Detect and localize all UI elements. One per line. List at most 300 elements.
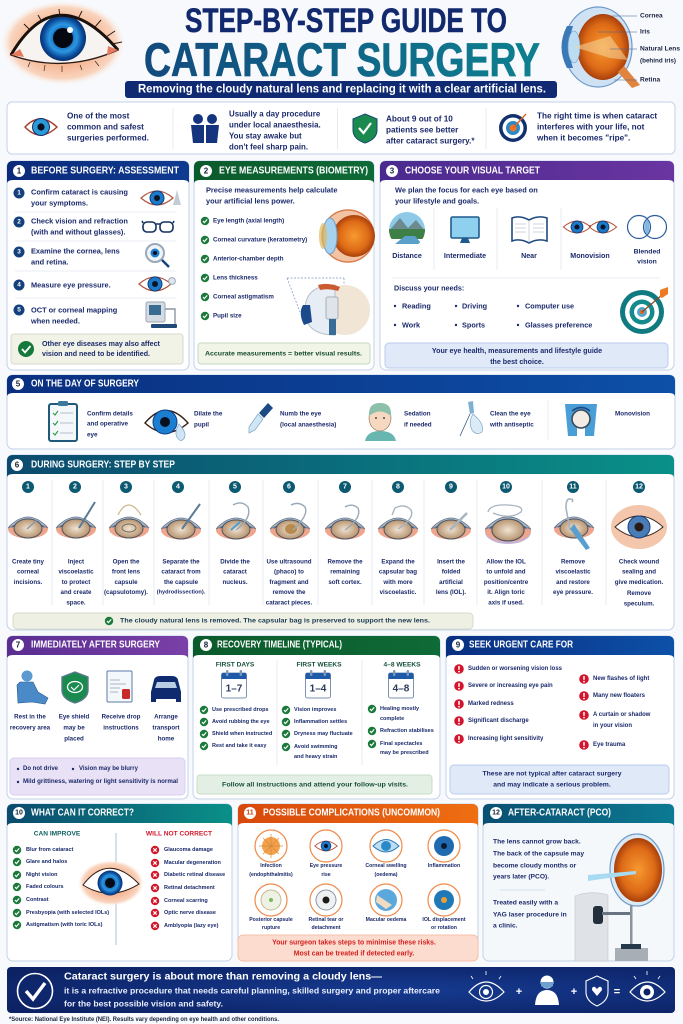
callout: what to expect: Mild grittiness, watering or light sensitivity is normal bbox=[23, 779, 178, 785]
complication: corneal swelling: Corneal swelling bbox=[365, 863, 407, 869]
icon: glasses bbox=[142, 221, 174, 232]
item: dilate pupil: pupil bbox=[194, 422, 209, 428]
intro text: your artificial lens power. bbox=[206, 196, 295, 206]
step 10: position/centre bbox=[484, 579, 529, 586]
step 9: artificial bbox=[439, 579, 463, 586]
step 9: Insert the bbox=[437, 558, 465, 566]
callout: capsular bag preserved: The cloudy natural lens is removed. The capsular bag is preserved to support the new lens. bbox=[120, 618, 430, 624]
header: after surgery bbox=[7, 636, 188, 658]
icon: OCT machine bbox=[146, 302, 177, 328]
needs list bbox=[394, 284, 592, 330]
header: what can it correct: WHAT CAN IT CORRECT? bbox=[31, 808, 134, 818]
column: first weeks bbox=[282, 662, 353, 760]
option: distance bbox=[388, 212, 426, 260]
fact: safest surgeries: surgeries performed. bbox=[67, 134, 149, 142]
item: transport home: home bbox=[158, 736, 175, 742]
fact: right time: The right time is when cataract bbox=[537, 112, 657, 120]
step 11: 11 bbox=[569, 484, 577, 490]
list: can improve: CAN IMPROVE bbox=[34, 830, 81, 838]
list: can improve: Contrast bbox=[26, 897, 49, 903]
complication: retinal tear: Retinal tear or bbox=[309, 917, 343, 923]
step 3 bbox=[104, 481, 149, 596]
header: complications bbox=[238, 804, 478, 826]
header: after surgery: 7 bbox=[16, 640, 21, 650]
icon: target bbox=[499, 114, 527, 142]
panel 11: possible complications bbox=[238, 804, 478, 961]
needs list: Driving bbox=[462, 302, 487, 310]
intro text bbox=[395, 186, 538, 206]
intro text bbox=[206, 186, 337, 206]
needs list: Work bbox=[402, 320, 421, 330]
column: first days: Avoid rubbing the eye bbox=[212, 719, 270, 725]
step 8: 8 bbox=[396, 484, 400, 490]
list: will not correct bbox=[146, 830, 225, 930]
callout: serious problem: These are not typical after cataract surgery bbox=[482, 770, 622, 778]
list: will not correct: Retinal detachment bbox=[164, 885, 215, 891]
callout: follow-up visits: Follow all instructions and attend your follow-up visits. bbox=[222, 782, 408, 788]
list: can improve: Presbyopia (with selected IOLs) bbox=[26, 910, 109, 916]
icon: eye bbox=[25, 118, 57, 136]
fact: 9 out of 10: patients see better bbox=[386, 126, 459, 134]
text: explanation: become cloudy months or bbox=[493, 862, 577, 870]
column: 4 to 8 weeks: 4–8 WEEKS bbox=[383, 662, 421, 668]
fact: right time: when it becomes "ripe". bbox=[536, 134, 630, 142]
eye anatomy diagram with labels: Natural Lens bbox=[640, 46, 680, 52]
step 12: 12 bbox=[635, 484, 643, 490]
step 9: 9 bbox=[449, 484, 453, 490]
step 6: Use ultrasound bbox=[266, 558, 312, 566]
step 5: when needed. bbox=[30, 316, 80, 326]
header: recovery timeline: RECOVERY TIMELINE (TYPICAL) bbox=[217, 640, 342, 650]
item: drop instructions: instructions bbox=[103, 724, 139, 732]
header: complications: 11 bbox=[246, 810, 254, 816]
list: warning signs left: Marked redness bbox=[468, 701, 514, 707]
step 9: lens (IOL). bbox=[436, 589, 466, 596]
list: warning signs right: New flashes of light bbox=[593, 676, 649, 682]
complication: capsule rupture: rupture bbox=[262, 925, 280, 931]
header: during surgery: 6 bbox=[15, 460, 20, 470]
column: first weeks: Avoid swimming bbox=[294, 744, 338, 750]
step 12 bbox=[611, 481, 667, 608]
text: treatment: YAG laser procedure in bbox=[493, 912, 567, 918]
source footnote: *Source: National Eye Institute (NEI). Results vary depending on eye health and other conditions. bbox=[9, 1017, 279, 1023]
eye anatomy diagram with labels: (behind iris) bbox=[640, 58, 676, 64]
equation icons: eye + surgeon + shield = better vision: = bbox=[614, 986, 620, 998]
illustration: YAG laser device bbox=[575, 893, 648, 961]
fact: safest surgeries: One of the most bbox=[67, 112, 130, 120]
header: biometry bbox=[194, 161, 374, 183]
step 11 bbox=[553, 481, 594, 596]
eye anatomy diagram with labels: Cornea bbox=[640, 12, 663, 20]
header: before surgery bbox=[7, 161, 189, 183]
step 4: 4 bbox=[176, 484, 180, 490]
step 2: Inject bbox=[68, 558, 84, 566]
header: biometry: 2 bbox=[204, 166, 209, 176]
step 5 bbox=[216, 481, 256, 586]
checklist of measurements: Pupil size bbox=[213, 312, 242, 320]
step 2: and create bbox=[61, 589, 92, 596]
header: before surgery: BEFORE SURGERY: ASSESSMENT bbox=[31, 166, 179, 176]
step 1: Create tiny bbox=[12, 558, 45, 566]
step 8 bbox=[378, 481, 418, 596]
fact: day procedure bbox=[229, 110, 321, 152]
item: clean with antiseptic: Clean the eye bbox=[490, 410, 531, 418]
icon: eye pressure bbox=[139, 277, 175, 291]
step 1: incisions. bbox=[14, 579, 43, 586]
step 9: folded bbox=[442, 568, 460, 576]
text: explanation: The back of the capsule may bbox=[493, 850, 584, 858]
callout: serious problem bbox=[450, 765, 669, 794]
step 5: 5 bbox=[233, 484, 237, 490]
complication: IOL displacement: or rotation bbox=[431, 925, 457, 931]
step 3: Open the bbox=[113, 558, 140, 566]
step 6: 6 bbox=[287, 484, 291, 490]
panel 10: what can it correct bbox=[7, 804, 232, 961]
column: 4 to 8 weeks bbox=[368, 662, 434, 756]
complication: pressure rise bbox=[310, 830, 342, 878]
step 3: 3 bbox=[17, 248, 21, 256]
step 11: and restore bbox=[556, 579, 590, 586]
title bbox=[144, 2, 540, 86]
list: will not correct: WILL NOT CORRECT bbox=[146, 830, 212, 838]
complication: capsule rupture bbox=[249, 884, 293, 931]
text: explanation: years later (PCO). bbox=[493, 874, 549, 880]
step 1: 1 bbox=[26, 484, 30, 490]
step 10: 10 bbox=[502, 484, 510, 490]
callout: other eye diseases: Other eye diseases may also affect bbox=[42, 340, 161, 348]
item: sedation: Sedation bbox=[404, 410, 431, 418]
item: monovision drape: Monovision bbox=[615, 410, 650, 418]
header hero eye illustration bbox=[1, 1, 125, 85]
item: sedation: if needed bbox=[404, 422, 432, 428]
column: first days: Shield when instructed bbox=[212, 731, 272, 737]
list: warning signs right: Many new floaters bbox=[593, 693, 646, 699]
step 11: Remove bbox=[561, 558, 586, 566]
item: confirm details: Confirm details bbox=[87, 410, 133, 418]
option: blended vision bbox=[628, 216, 666, 266]
icon: green shield bbox=[353, 114, 377, 143]
callout: accurate measurements bbox=[198, 343, 370, 364]
checklist of measurements: Lens thickness bbox=[213, 274, 258, 282]
list: can improve: Night vision bbox=[26, 872, 58, 878]
callout: minimise risks bbox=[238, 935, 478, 961]
fact: right time bbox=[536, 112, 657, 142]
option: monovision: Monovision bbox=[570, 252, 610, 260]
item: clean with antiseptic: with antiseptic bbox=[489, 422, 534, 428]
column: 4 to 8 weeks: Refraction stabilises bbox=[380, 728, 434, 734]
step 3: Examine the cornea, lens bbox=[31, 246, 120, 256]
header: visual target bbox=[380, 161, 674, 183]
header: after-cataract: 12 bbox=[492, 810, 500, 816]
panel 8: recovery timeline bbox=[193, 636, 440, 799]
complication: pressure rise: Eye pressure bbox=[310, 863, 342, 869]
checklist of measurements bbox=[201, 217, 307, 320]
item: drop instructions bbox=[102, 671, 141, 732]
step 6: remove the bbox=[272, 589, 306, 596]
item: numb the eye: (local anaesthesia) bbox=[280, 422, 336, 428]
column: 4 to 8 weeks: complete bbox=[380, 716, 404, 722]
step 7: soft cortex. bbox=[328, 579, 362, 586]
item: confirm details: eye bbox=[87, 432, 98, 438]
fact: right time: interferes with your life, not bbox=[537, 122, 645, 132]
callout: follow-up visits bbox=[197, 775, 432, 794]
fact: day procedure: under local anaesthesia. bbox=[229, 120, 321, 130]
step 10: to unfold and bbox=[486, 568, 526, 576]
item: eye shield: placed bbox=[64, 736, 84, 742]
item: eye shield bbox=[59, 672, 90, 742]
subtitle banner: Removing the cloudy natural lens and replacing it with a clear artificial lens. bbox=[138, 84, 546, 96]
column: first weeks: Inflammation settles bbox=[294, 719, 347, 725]
closing text: it is a refractive procedure that needs careful planning, skilled surgery and proper aftercare bbox=[64, 986, 440, 996]
callout: minimise risks: Your surgeon takes steps to minimise these risks. bbox=[272, 940, 436, 946]
item: clean with antiseptic bbox=[460, 401, 534, 436]
list: can improve: Glare and halos bbox=[26, 859, 67, 865]
step 12: give medication. bbox=[615, 579, 664, 586]
fact: 9 out of 10: after cataract surgery.* bbox=[386, 136, 475, 146]
step 12: Check wound bbox=[619, 558, 659, 566]
step 10 bbox=[484, 481, 531, 606]
option: intermediate: Intermediate bbox=[444, 252, 486, 260]
step 3: (capsulotomy). bbox=[104, 589, 148, 596]
column: first days: Use prescribed drops bbox=[212, 707, 269, 713]
complication: macular oedema bbox=[366, 884, 406, 923]
header: day of surgery: 5 bbox=[16, 380, 21, 388]
step 8: capsular bag bbox=[379, 568, 417, 576]
column: first weeks: and heavy strain bbox=[294, 754, 338, 760]
fact: day procedure: don't feel sharp pain. bbox=[229, 142, 308, 152]
callout: other eye diseases: vision and need to be identified. bbox=[42, 350, 150, 358]
step 3: and retina. bbox=[31, 258, 68, 266]
callout: best choice bbox=[385, 343, 668, 368]
complication: infection bbox=[249, 830, 293, 878]
step 1 bbox=[14, 188, 128, 208]
column: first weeks: 1–4 bbox=[310, 684, 327, 694]
step 3: 3 bbox=[124, 484, 128, 490]
illustration: central eye bbox=[78, 860, 144, 906]
option: near: Near bbox=[521, 252, 537, 260]
step 3 bbox=[14, 246, 120, 266]
step 6 bbox=[266, 481, 312, 606]
header: day of surgery: ON THE DAY OF SURGERY bbox=[31, 378, 139, 390]
header: what can it correct: 10 bbox=[15, 810, 23, 816]
complication: inflammation bbox=[428, 830, 460, 869]
list: warning signs left: Severe or increasing eye pain bbox=[468, 683, 553, 689]
step 6: (phaco) to bbox=[274, 568, 304, 576]
step 4: cataract from bbox=[161, 568, 201, 576]
step 4: Measure eye pressure. bbox=[31, 280, 111, 290]
needs list: Computer use bbox=[525, 302, 574, 310]
column: first days: 1–7 bbox=[226, 684, 243, 694]
complication: inflammation: Inflammation bbox=[428, 863, 460, 869]
complication: corneal swelling bbox=[365, 830, 407, 878]
header: complications: POSSIBLE COMPLICATIONS (UNCOMMON) bbox=[263, 808, 440, 818]
header: after-cataract bbox=[483, 804, 674, 826]
eye anatomy diagram with labels: Iris bbox=[640, 28, 650, 36]
item: confirm details bbox=[49, 401, 133, 441]
callout: serious problem: and may indicate a serious problem. bbox=[493, 782, 611, 788]
panel 9: seek urgent care bbox=[446, 636, 674, 799]
step 8: with more bbox=[382, 579, 413, 586]
title: STEP-BY-STEP GUIDE TO bbox=[185, 2, 507, 40]
callout: what to expect: Do not drive bbox=[23, 766, 59, 772]
list: warning signs left: Increasing light sensitivity bbox=[468, 736, 544, 742]
header: recovery timeline: 8 bbox=[204, 640, 209, 650]
step 1 bbox=[8, 481, 48, 586]
option: intermediate bbox=[444, 217, 486, 260]
step 1: your symptoms. bbox=[31, 198, 88, 208]
step 1: Confirm cataract is causing bbox=[31, 188, 128, 196]
header: during surgery bbox=[7, 455, 674, 477]
step 10: it. Align toric bbox=[487, 589, 525, 596]
title: CATARACT SURGERY bbox=[144, 33, 540, 86]
step 5 bbox=[14, 304, 118, 326]
intro text: your lifestyle and goals. bbox=[395, 196, 479, 206]
step 2: to protect bbox=[62, 579, 90, 586]
item: numb the eye bbox=[249, 403, 336, 433]
panel 1: before surgery assessment bbox=[7, 161, 189, 370]
column: 4 to 8 weeks: Final spectacles bbox=[380, 741, 422, 747]
closing banner bbox=[7, 967, 675, 1013]
list: will not correct: Macular degeneration bbox=[164, 860, 221, 866]
step 12: speculum. bbox=[624, 600, 655, 608]
panel 12: after-cataract PCO bbox=[483, 804, 674, 961]
fact: day procedure: Usually a day procedure bbox=[229, 110, 321, 118]
header: visual target: CHOOSE YOUR VISUAL TARGET bbox=[405, 166, 540, 176]
item: transport home: transport bbox=[152, 724, 180, 732]
panel 6: during surgery step by step bbox=[7, 455, 674, 630]
step 2 bbox=[14, 216, 128, 236]
step 7: remaining bbox=[330, 568, 360, 576]
illustration: biometer device bbox=[287, 278, 370, 335]
complication: infection: (endophthalmitis) bbox=[249, 872, 293, 878]
complication: IOL displacement bbox=[422, 884, 466, 931]
callout: best choice: the best choice. bbox=[490, 358, 544, 366]
subtitle banner bbox=[125, 81, 557, 98]
list: can improve: Faded colours bbox=[26, 884, 64, 890]
complication: macular oedema: Macular oedema bbox=[366, 917, 406, 923]
eye anatomy diagram with labels: Retina bbox=[640, 76, 660, 84]
callout: what to expect bbox=[10, 758, 185, 795]
complication: IOL displacement: IOL displacement bbox=[422, 917, 466, 923]
item: rest in recovery area: Rest in the bbox=[14, 714, 46, 720]
list: will not correct: Glaucoma damage bbox=[164, 847, 213, 853]
header: urgent care bbox=[446, 636, 674, 658]
text: explanation: The lens cannot grow back. bbox=[493, 838, 581, 846]
checklist of measurements: Corneal astigmatism bbox=[213, 294, 274, 300]
panel 5: on the day of surgery bbox=[7, 375, 675, 449]
header: before surgery: 1 bbox=[17, 166, 22, 176]
item: dilate pupil: Dilate the bbox=[194, 410, 223, 418]
item: rest in recovery area bbox=[10, 670, 51, 732]
illustration: eye cross-section bbox=[319, 210, 375, 262]
callout: best choice: Your eye health, measurements and lifestyle guide bbox=[432, 347, 602, 355]
step 2: viscoelastic bbox=[58, 568, 94, 576]
complication: infection: Infection bbox=[260, 863, 282, 869]
header: after-cataract: AFTER-CATARACT (PCO) bbox=[508, 808, 611, 818]
icon: target with arrow bbox=[620, 287, 668, 334]
item: drop instructions: Receive drop bbox=[102, 714, 141, 720]
header: urgent care: 9 bbox=[456, 640, 461, 650]
item: numb the eye: Numb the eye bbox=[280, 410, 322, 418]
complication: corneal swelling: (oedema) bbox=[374, 872, 398, 878]
item: rest in recovery area: recovery area bbox=[10, 724, 51, 732]
header: recovery timeline bbox=[193, 636, 440, 658]
item: confirm details: and operative bbox=[87, 420, 128, 428]
needs list: Reading bbox=[402, 302, 431, 310]
fact: day procedure: You stay awake but bbox=[229, 132, 302, 140]
text: treatment: Treated easily with a bbox=[493, 900, 558, 906]
step 5: Divide the bbox=[220, 558, 250, 566]
list: will not correct: Corneal scarring bbox=[164, 898, 208, 904]
list: will not correct: Diabetic retinal disease bbox=[164, 872, 225, 878]
step 3: front lens bbox=[112, 568, 141, 576]
step 5: nucleus. bbox=[222, 579, 248, 586]
step 3: capsule bbox=[114, 579, 138, 586]
callout: what to expect: Vision may be blurry bbox=[79, 766, 139, 772]
closing text: for the best possible vision and safety. bbox=[64, 1000, 223, 1008]
step 4: (hydrodissection). bbox=[157, 590, 206, 596]
closing text bbox=[64, 972, 440, 1008]
intro facts strip bbox=[7, 102, 675, 154]
checklist of measurements: Eye length (axial length) bbox=[213, 218, 284, 224]
icon: two people bbox=[191, 114, 219, 143]
text: explanation bbox=[493, 838, 584, 880]
option: near bbox=[512, 217, 547, 260]
step 11: eye pressure. bbox=[553, 589, 593, 596]
panel 3: choose your visual target bbox=[380, 161, 674, 370]
column: 4 to 8 weeks: 4–8 bbox=[393, 684, 410, 694]
step 5: OCT or corneal mapping bbox=[31, 306, 118, 314]
fact: safest surgeries bbox=[67, 112, 149, 142]
step 10: axis if used. bbox=[488, 600, 524, 606]
column: first days: FIRST DAYS bbox=[216, 662, 255, 668]
text: treatment: a clinic. bbox=[493, 922, 518, 930]
step 2: (with and without glasses). bbox=[31, 228, 125, 236]
step 12: Remove bbox=[627, 590, 652, 597]
step 1: 1 bbox=[17, 190, 21, 196]
list: warning signs left bbox=[454, 664, 563, 744]
column: 4 to 8 weeks: may be prescribed bbox=[380, 750, 429, 756]
column: first weeks: FIRST WEEKS bbox=[296, 662, 342, 668]
text: treatment bbox=[493, 900, 567, 930]
option: blended vision: vision bbox=[637, 258, 657, 266]
list: can improve: Blur from cataract bbox=[26, 847, 74, 853]
step 5: 5 bbox=[17, 306, 21, 314]
step 4: Separate the bbox=[162, 558, 200, 566]
intro text: Precise measurements help calculate bbox=[206, 186, 337, 194]
equation icons: eye + surgeon + shield = better vision: + bbox=[516, 986, 522, 998]
icon: eye exam bbox=[141, 190, 181, 205]
step 6: cataract pieces. bbox=[266, 600, 312, 606]
complication: retinal tear bbox=[309, 884, 343, 931]
callout: minimise risks: Most can be treated if detected early. bbox=[294, 950, 414, 958]
icon: magnifier bbox=[146, 244, 169, 267]
step 4 bbox=[14, 280, 111, 290]
list: warning signs left: Sudden or worsening vision loss bbox=[468, 666, 563, 672]
panel 2: eye measurements bbox=[194, 161, 375, 370]
step 7 bbox=[325, 481, 365, 586]
equation icons: eye + surgeon + shield = better vision bbox=[469, 971, 665, 1006]
step 4 bbox=[157, 481, 206, 596]
step 11: viscoelastic bbox=[555, 568, 591, 576]
list: warning signs right: A curtain or shadow bbox=[593, 712, 651, 718]
header: what can it correct bbox=[7, 804, 232, 826]
step 5: cataract bbox=[223, 568, 247, 576]
checklist of measurements: Corneal curvature (keratometry) bbox=[213, 236, 307, 244]
item: eye shield: Eye shield bbox=[59, 714, 90, 720]
needs list: Sports bbox=[462, 320, 485, 330]
list: will not correct: Amblyopia (lazy eye) bbox=[164, 923, 219, 929]
